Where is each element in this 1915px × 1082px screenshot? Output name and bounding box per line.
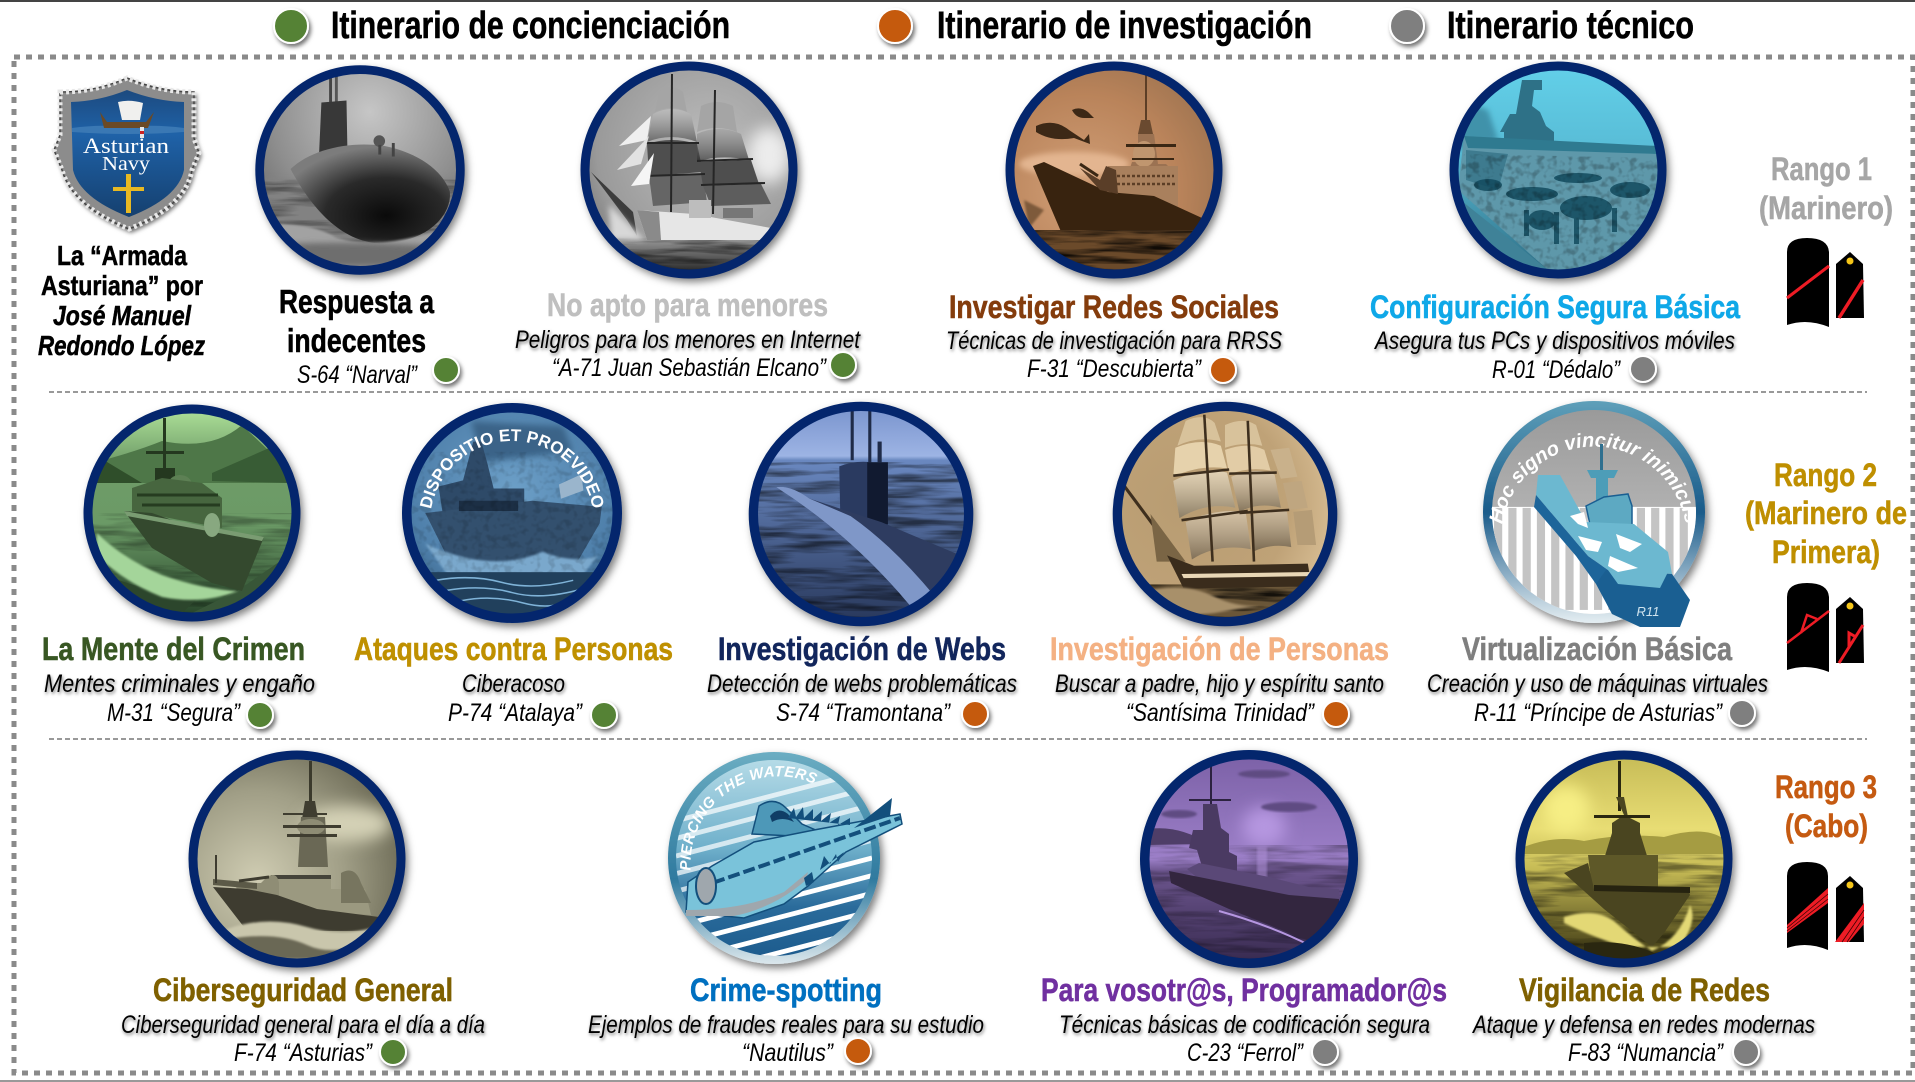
ship name and dot: “A-71 Juan Sebastián Elcano” xyxy=(552,354,827,382)
panel: Virtualizacion Basica xyxy=(1427,400,1770,733)
badge: Nautilus xyxy=(666,750,903,974)
panel: Para vosotr@s, Programador@s xyxy=(1041,750,1447,1067)
badge: engraved frigate blue: DISPOSITIO ET PROEVIDEO xyxy=(420,429,604,508)
rank 2 label: Rango 2 xyxy=(1774,457,1877,493)
subtitle: Ciberseguridad general para el día a día xyxy=(121,1011,485,1039)
subtitle: Mentes criminales y engaño xyxy=(44,670,315,698)
text: author credit: La “Armada xyxy=(57,240,187,271)
ship name and dot: M-31 “Segura” xyxy=(107,699,241,727)
top edge line xyxy=(0,0,1915,2)
rank 1 label: (Marinero) xyxy=(1759,190,1893,226)
ship name and dot: F-83 “Numancia” xyxy=(1568,1039,1724,1067)
title: Crime-spotting xyxy=(690,972,882,1008)
title: Virtualización Básica xyxy=(1462,631,1732,667)
title: Investigación de Personas xyxy=(1050,631,1389,667)
badge: frigate yellow xyxy=(1516,751,1732,967)
badge: carrier cyan xyxy=(1450,62,1666,278)
panel: Configuracion Segura Basica xyxy=(1370,62,1740,384)
ship name and dot: P-74 “Atalaya” xyxy=(448,699,583,727)
badge: frigate green xyxy=(84,405,300,621)
submarine xyxy=(686,798,902,918)
icon: rank 3 epaulettes xyxy=(1787,862,1864,950)
legend: awareness: Itinerario de concienciación xyxy=(331,5,730,47)
ship name and dot: R-11 “Príncipe de Asturias” xyxy=(1474,699,1723,727)
rank 1 label xyxy=(1759,151,1893,226)
title: Ciberseguridad General xyxy=(153,972,453,1008)
ship name and dot: S-74 “Tramontana” xyxy=(776,699,951,727)
bottom edge line xyxy=(0,1080,1915,1082)
rank 3 label xyxy=(1775,769,1877,844)
subtitle: Ataque y defensa en redes modernas xyxy=(1471,1011,1815,1039)
title: Respuesta a xyxy=(279,283,435,320)
subtitle: Asegura tus PCs y dispositivos móviles xyxy=(1373,327,1735,355)
subtitle: Detección de webs problemáticas xyxy=(707,670,1017,698)
badge: Principe de Asturias carrier xyxy=(1480,400,1714,632)
title: Vigilancia de Redes xyxy=(1519,972,1770,1008)
legend: technical xyxy=(1390,5,1694,47)
icon: rank 1 epaulettes xyxy=(1787,238,1864,327)
text: author credit: Redondo López xyxy=(38,330,205,361)
badge: Principe de Asturias carrier: Hoc signo vincitur inimicus xyxy=(1489,432,1691,524)
text: author credit: Asturiana” por xyxy=(41,270,203,301)
panel: Investigacion de Personas xyxy=(1050,402,1389,727)
panel: Investigacion de Webs xyxy=(707,402,1017,727)
ship name and dot: F-74 “Asturias” xyxy=(234,1039,373,1067)
subtitle: Ciberacoso xyxy=(462,670,565,698)
rank 3 label: Rango 3 xyxy=(1775,769,1877,805)
panel: Ciberseguridad General xyxy=(121,751,485,1067)
row divider 2 xyxy=(49,738,1867,740)
ship name and dot: F-31 “Descubierta” xyxy=(1027,355,1202,383)
rank 1 label: Rango 1 xyxy=(1771,151,1872,187)
panel: Ataques contra Personas xyxy=(354,402,673,735)
panel: Vigilancia de Redes xyxy=(1471,751,1815,1067)
badge: sailing ship sepia xyxy=(1113,402,1337,626)
panel: La Mente del Crimen xyxy=(42,405,315,728)
logo: Asturian Navy shield xyxy=(54,78,199,229)
ship name and dot: S-64 “Narval” xyxy=(297,361,418,389)
ship name and dot: “Santísima Trinidad” xyxy=(1126,699,1315,727)
panel: Respuesta a indecentes: indecentes xyxy=(287,322,426,359)
panel: Respuesta a indecentes xyxy=(256,66,464,389)
legend: research: Itinerario de investigación xyxy=(937,5,1312,47)
title: Para vosotr@s, Programador@s xyxy=(1041,972,1447,1008)
ship name and dot: “Nautilus” xyxy=(742,1039,834,1067)
carrier xyxy=(1534,444,1690,627)
carrier: R11 xyxy=(1637,604,1659,619)
badge: frigate sepia grey xyxy=(189,751,405,967)
badge: submarine blue xyxy=(749,402,973,626)
text: author credit: José Manuel xyxy=(53,300,192,331)
title: Investigación de Webs xyxy=(718,631,1006,667)
panel: Investigar Redes Sociales xyxy=(946,62,1282,383)
legend: technical: Itinerario técnico xyxy=(1447,5,1694,47)
rank 3 label: (Cabo) xyxy=(1785,808,1868,844)
panel: Crime-spotting xyxy=(588,750,986,1071)
subtitle: Creación y uso de máquinas virtuales xyxy=(1427,670,1768,698)
icon: rank 2 epaulettes xyxy=(1787,583,1864,672)
badge: engraved frigate blue xyxy=(400,402,630,632)
title: La Mente del Crimen xyxy=(42,631,305,667)
badge: submarine grey xyxy=(256,66,464,274)
ship name and dot: R-01 “Dédalo” xyxy=(1492,356,1621,384)
legend xyxy=(274,5,1694,47)
title: Configuración Segura Básica xyxy=(1370,289,1740,325)
panel: No apto para menores xyxy=(515,62,861,382)
badge: tall ship grey xyxy=(581,62,797,278)
badge: battleship purple xyxy=(1140,750,1358,968)
subtitle: Buscar a padre, hijo y espíritu santo xyxy=(1055,670,1384,698)
title: Investigar Redes Sociales xyxy=(949,289,1279,325)
rank 2 label xyxy=(1745,457,1907,570)
subtitle: Técnicas de investigación para RRSS xyxy=(946,327,1282,355)
subtitle: Técnicas básicas de codificación segura xyxy=(1059,1011,1430,1039)
title: Ataques contra Personas xyxy=(354,631,673,667)
text: author credit xyxy=(38,240,205,361)
row divider 1 xyxy=(49,391,1867,393)
subtitle: Peligros para los menores en Internet xyxy=(515,326,861,354)
rank 2 label: Primera) xyxy=(1772,534,1880,570)
badge: frigate orange xyxy=(1006,62,1222,278)
subtitle: Ejemplos de fraudes reales para su estudio xyxy=(588,1011,984,1039)
title: No apto para menores xyxy=(547,287,828,323)
logo: Asturian Navy shield: Asturian xyxy=(83,133,169,158)
logo: Asturian Navy shield: Navy xyxy=(102,153,150,175)
badge: Nautilus: PIERCING THE WATERS xyxy=(680,766,818,870)
ship name and dot: C-23 “Ferrol” xyxy=(1187,1039,1304,1067)
